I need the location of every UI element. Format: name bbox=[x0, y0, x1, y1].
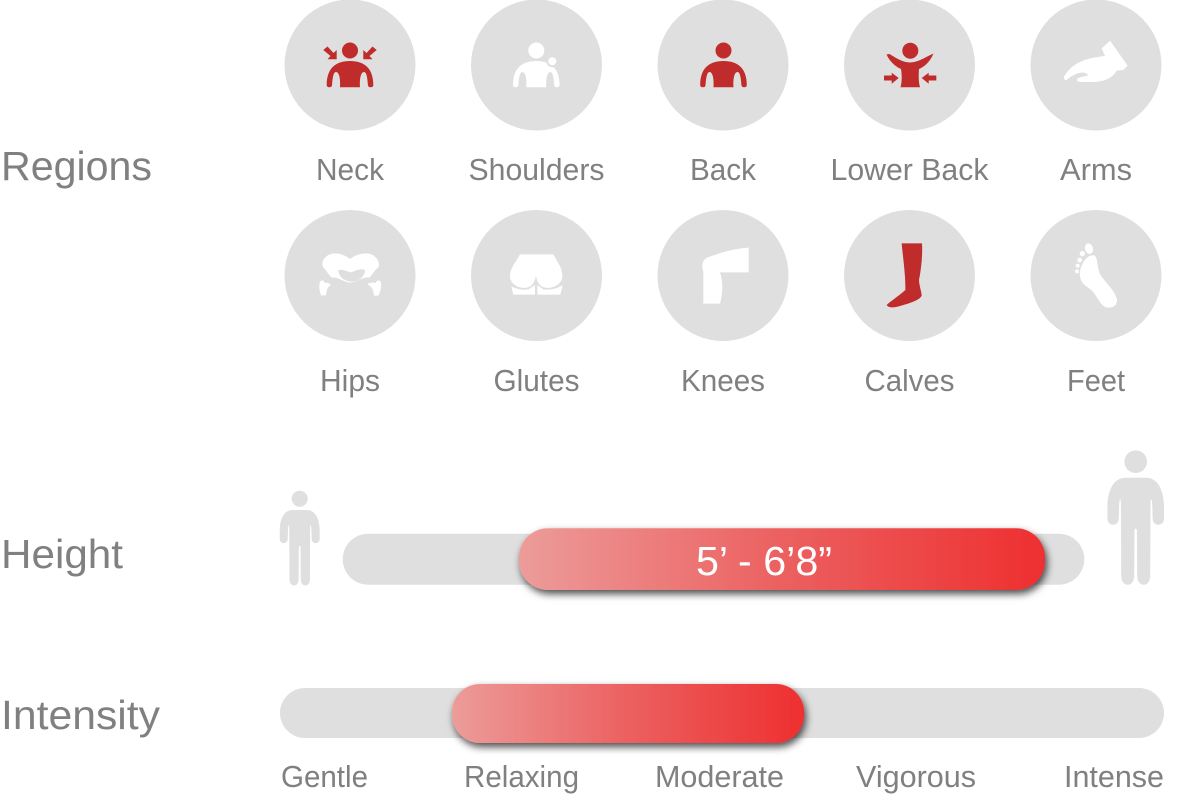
region: Arms bbox=[1030, 0, 1162, 187]
label: Calves: Calves bbox=[864, 363, 954, 398]
region: Hips bbox=[284, 210, 416, 398]
height range bar bbox=[519, 528, 1045, 590]
label: Feet: Feet bbox=[1067, 363, 1125, 398]
icon: short person bbox=[280, 491, 320, 585]
height range value: 5’ - 6’8” bbox=[696, 538, 832, 584]
icon: pelvis bbox=[319, 253, 381, 296]
icon: shoulders bbox=[513, 42, 560, 87]
intensity scale labels: Gentle bbox=[281, 759, 368, 794]
icon: arm bbox=[1064, 41, 1128, 82]
region: Feet bbox=[1030, 210, 1162, 398]
label: Glutes: Glutes bbox=[494, 363, 580, 398]
label: Arms: Arms bbox=[1060, 152, 1132, 187]
region: Back bbox=[658, 0, 788, 187]
heading: Intensity: Intensity bbox=[1, 692, 161, 738]
label: Hips: Hips bbox=[320, 363, 380, 398]
icon: tall person bbox=[1107, 450, 1164, 585]
region: Neck bbox=[284, 0, 416, 187]
icon: lower back bbox=[884, 43, 936, 87]
heading: Regions: Regions bbox=[1, 143, 152, 189]
region: Knees bbox=[658, 210, 788, 398]
icon: glutes bbox=[510, 254, 563, 295]
region: Shoulders bbox=[468, 0, 604, 187]
intensity scale labels: Moderate bbox=[655, 759, 784, 794]
intensity range bar bbox=[452, 684, 804, 743]
icon: calf bbox=[887, 243, 922, 307]
height track bbox=[343, 534, 1084, 585]
intensity track bbox=[280, 688, 1164, 738]
icon: knee bbox=[702, 248, 749, 304]
intensity scale labels bbox=[281, 759, 1164, 794]
region: Glutes bbox=[471, 210, 602, 398]
intensity scale labels: Vigorous bbox=[856, 759, 976, 794]
region: Lower Back bbox=[830, 0, 989, 187]
icon: back bbox=[700, 42, 747, 87]
label: Lower Back: Lower Back bbox=[830, 152, 989, 187]
intensity scale labels: Intense bbox=[1064, 759, 1164, 794]
label: Neck: Neck bbox=[316, 152, 384, 187]
icon: neck bbox=[323, 42, 377, 87]
label: Back: Back bbox=[690, 152, 756, 187]
label: Knees: Knees bbox=[681, 363, 765, 398]
heading: Height: Height bbox=[1, 531, 124, 577]
region: Calves bbox=[844, 210, 975, 398]
label: Shoulders: Shoulders bbox=[468, 152, 604, 187]
intensity scale labels: Relaxing bbox=[464, 759, 579, 794]
icon: foot bbox=[1075, 242, 1117, 308]
